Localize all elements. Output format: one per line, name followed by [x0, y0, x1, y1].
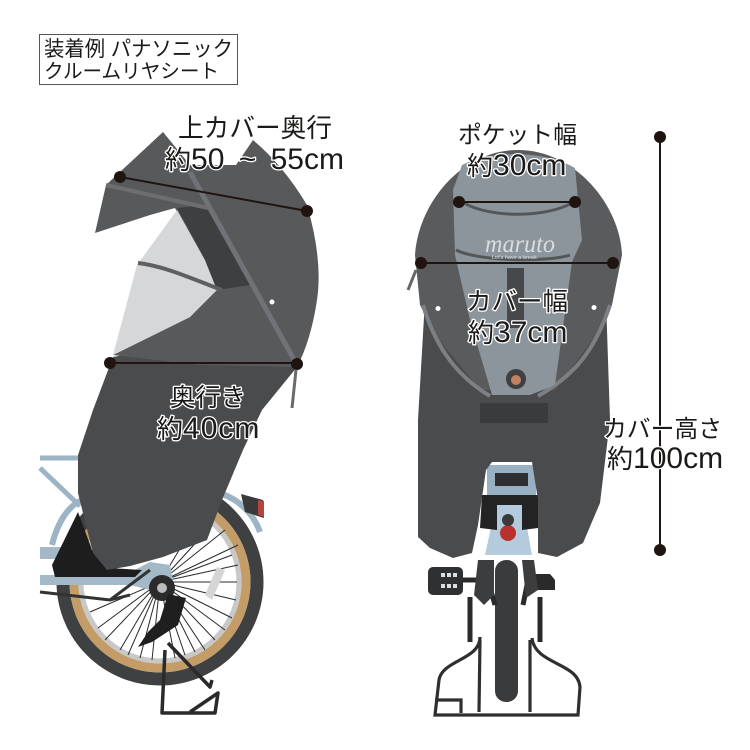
- label: cover height: [603, 416, 723, 475]
- frame strut: [190, 172, 297, 365]
- label: cover height: 約100cm: [607, 442, 723, 475]
- dimension: upper cover depth: [114, 171, 313, 217]
- clear window: [113, 210, 217, 355]
- hood snaps: [436, 305, 597, 311]
- side view bicycle with cover: [40, 132, 319, 713]
- dimension: cover width: [415, 257, 619, 269]
- zip pull: [408, 270, 416, 290]
- label box: example product: クルームリヤシート: [44, 60, 219, 83]
- tail light: [500, 514, 516, 541]
- label box: example product: 装着例 パナソニック: [44, 38, 233, 61]
- label: cover width: [466, 288, 568, 349]
- label: upper cover depth: 上カバー奥行: [178, 113, 332, 143]
- maruto logo: Let's have a break.: [492, 255, 539, 261]
- bicycle rear wheel, side view: [63, 485, 257, 679]
- buckle mesh area: [480, 403, 548, 423]
- label: depth: 奥行き: [170, 384, 246, 412]
- label: cover height: カバー高さ: [603, 416, 722, 443]
- drivetrain parts: [463, 560, 555, 642]
- window roll bar: [138, 263, 222, 290]
- label: upper cover depth: [165, 113, 344, 176]
- rear fender: [485, 500, 532, 555]
- heather grey panel: [453, 154, 582, 395]
- rear wheel: [495, 560, 518, 702]
- label: depth: [157, 384, 260, 445]
- maruto logo: maruto: [485, 231, 555, 258]
- visor edge: [106, 185, 208, 208]
- label: pocket width: [458, 122, 577, 182]
- bicycle rack and frame: [40, 458, 260, 600]
- rear view bicycle with cover: [408, 150, 622, 715]
- dimension: depth: [104, 357, 303, 370]
- derailleur and kickstand: [138, 575, 218, 713]
- badge: [506, 369, 526, 389]
- label: pocket width: ポケット幅: [458, 122, 577, 149]
- label: depth: 約40cm: [157, 412, 260, 445]
- dimension: cover height: [654, 131, 666, 556]
- label: cover width: 約37cm: [468, 316, 567, 349]
- zip pull: [292, 370, 296, 408]
- snap button: [270, 300, 274, 304]
- zipper strip: [507, 268, 524, 328]
- label: pocket width: 約30cm: [467, 149, 566, 182]
- dimension: pocket width: [453, 196, 581, 208]
- rear carrier: [487, 465, 536, 495]
- kickstand rear view: [435, 637, 580, 715]
- rear reflector: [241, 494, 264, 518]
- label: upper cover depth: 約50 ~ 55cm: [165, 143, 344, 176]
- hood outer: [415, 150, 622, 390]
- hood lower band: [423, 305, 610, 396]
- pocket flap: [456, 203, 572, 260]
- side cover body: [78, 340, 297, 570]
- side window shade: [177, 205, 250, 290]
- rear cover body: [418, 260, 610, 558]
- label box: example product: [40, 34, 238, 84]
- side cover canopy: [95, 132, 319, 367]
- pedal: [428, 567, 463, 595]
- label: cover width: カバー幅: [466, 288, 568, 316]
